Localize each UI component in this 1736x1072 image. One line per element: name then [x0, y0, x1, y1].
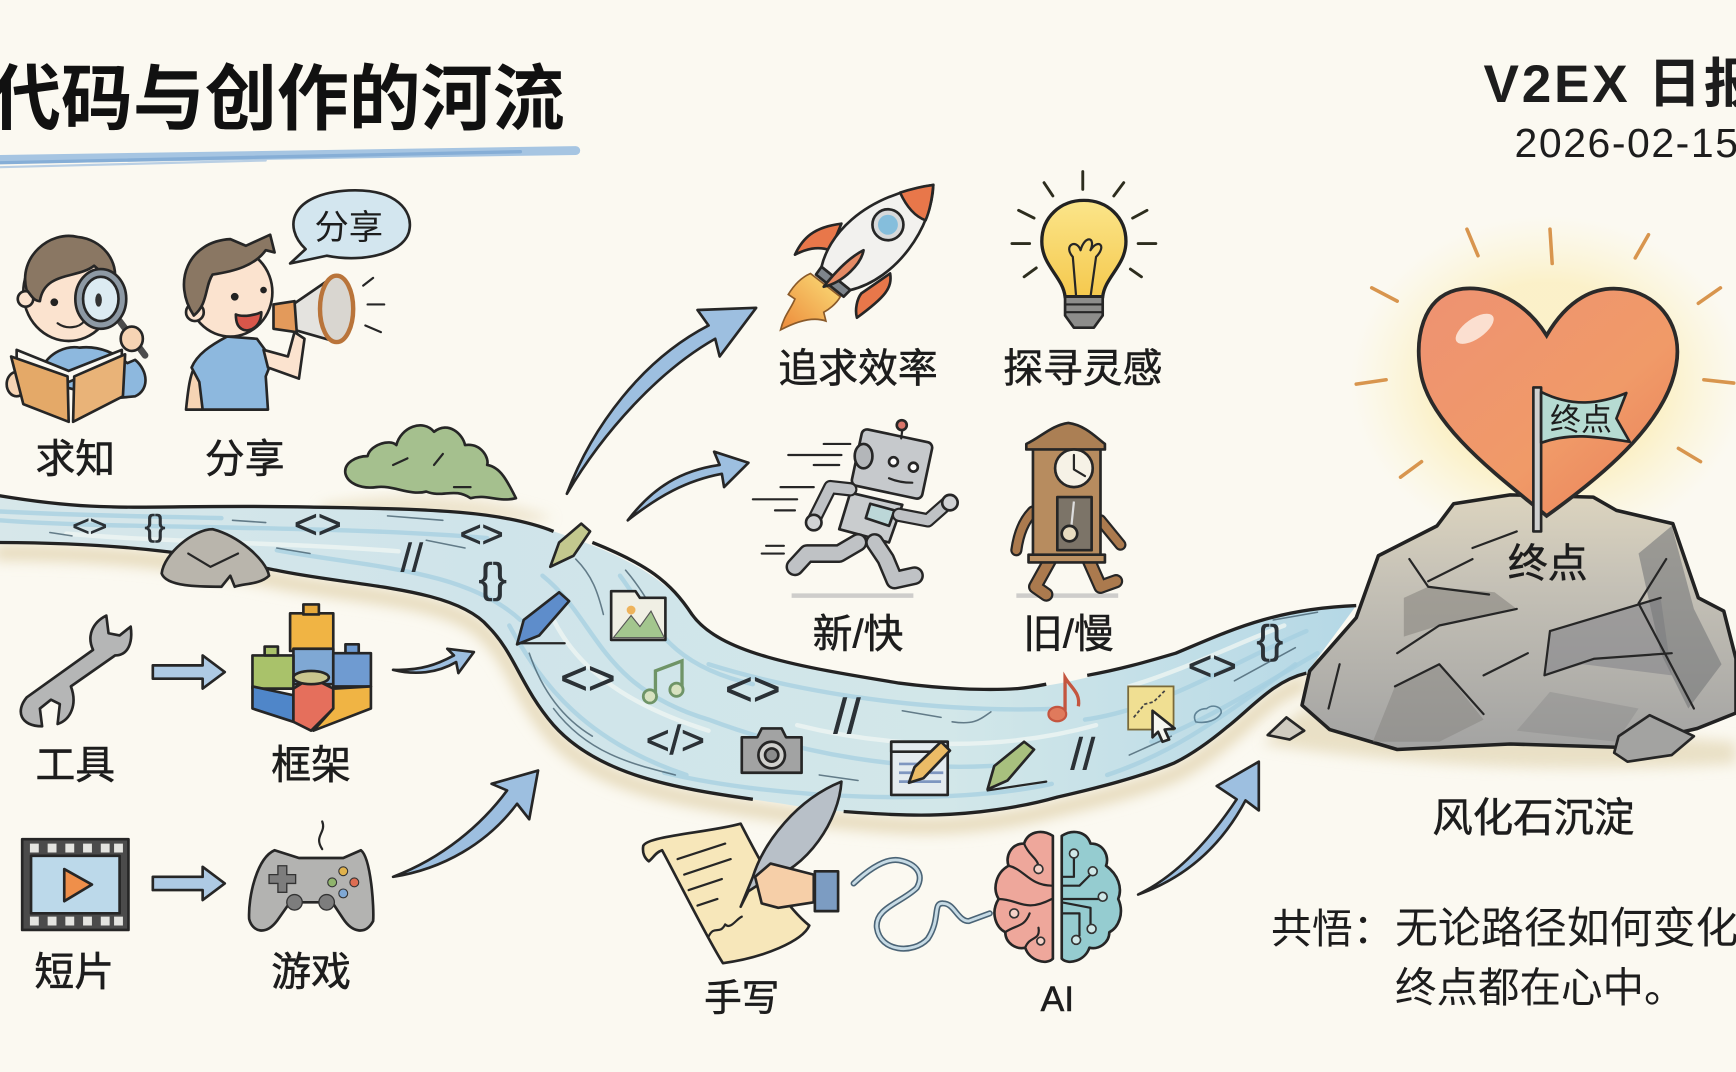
arrow: toward new and fast — [628, 452, 748, 520]
river with banks and current — [0, 495, 1373, 826]
title: 代码与创作的河流 — [0, 60, 565, 140]
river code symbols: {} — [479, 554, 507, 601]
label: rock 终点: 终点 — [1508, 542, 1588, 586]
label: 风化石沉淀: 风化石沉淀 — [1432, 794, 1634, 840]
header: V2EX daily and date: 2026-02-15 — [1515, 120, 1736, 166]
small stone left of boulder — [1268, 717, 1304, 740]
closing insight text: 共悟： — [1271, 906, 1394, 952]
icon: blue pen — [517, 592, 569, 644]
label: 求知: 求知 — [35, 438, 115, 482]
label: 工具: 工具 — [35, 743, 115, 787]
arrow: AI into river — [1138, 762, 1259, 895]
river code symbols: </> — [646, 717, 705, 763]
label: 新/快: 新/快 — [813, 613, 903, 657]
header: V2EX daily and date — [1484, 55, 1736, 166]
river code symbols: <> — [294, 501, 342, 547]
icon: sticky note with cursor — [1128, 686, 1175, 742]
label: AI: AI — [1041, 979, 1074, 1019]
label: 框架: 框架 — [271, 743, 351, 787]
icon: green pencil — [550, 524, 590, 567]
icon: brain half organic half circuit — [994, 832, 1121, 962]
icon: browser window with pencil — [891, 742, 950, 795]
arrow: framework into river — [393, 649, 474, 673]
speech bubble — [290, 190, 410, 263]
icon: building blocks — [252, 604, 371, 731]
figure: boy sharing with megaphone — [184, 235, 384, 410]
river rock — [162, 529, 269, 587]
river code symbols: // — [833, 690, 861, 744]
arrow: game into river — [393, 771, 538, 877]
closing insight text: 无论路径如何变化 — [1395, 905, 1736, 953]
river code symbols: <> — [725, 663, 781, 716]
bush — [321, 425, 554, 523]
icon: running robot — [753, 420, 958, 596]
icon: walking grandfather clock — [1016, 423, 1120, 596]
arrow: toward efficiency — [567, 308, 756, 494]
river code symbols: // — [1070, 730, 1096, 779]
glow and sun rays behind heart — [1351, 216, 1736, 548]
icon: rocket — [781, 185, 933, 330]
arrow: short video to game — [153, 867, 225, 900]
flag: 终点 — [1550, 403, 1612, 438]
river code symbols: {} — [1257, 618, 1283, 662]
label: 手写: 手写 — [704, 977, 779, 1019]
icon: film strip with play button — [22, 839, 128, 930]
icon: red music note — [1048, 678, 1079, 721]
icon: wrench — [21, 616, 131, 726]
heart destination — [1419, 288, 1677, 516]
icon: scroll, quill and hand — [643, 782, 841, 963]
speech bubble: 分享 — [314, 209, 383, 247]
label: 旧/慢: 旧/慢 — [1023, 613, 1114, 657]
icon: camera — [742, 728, 802, 773]
river code symbols: // — [401, 536, 424, 580]
icon: image folder — [611, 591, 665, 640]
label: 探寻灵感: 探寻灵感 — [1003, 347, 1162, 391]
label: 追求效率: 追求效率 — [778, 347, 938, 391]
arrow: tool to framework — [153, 655, 225, 689]
river code symbols — [72, 501, 1283, 779]
closing insight text — [1271, 905, 1736, 1011]
boulder — [1262, 495, 1736, 768]
river code symbols: <> — [560, 652, 616, 705]
closing insight text: 终点都在心中。 — [1395, 964, 1685, 1011]
river code symbols: <> — [72, 510, 107, 543]
icon: green music note — [643, 661, 683, 703]
icon: green pencil in river — [988, 742, 1046, 790]
label: 分享: 分享 — [205, 438, 285, 482]
flag — [1533, 387, 1630, 531]
title underline brush stroke — [0, 151, 576, 167]
small stone right of boulder — [1614, 715, 1694, 762]
label: 游戏: 游戏 — [271, 950, 351, 994]
small cloud scribble in river — [1195, 706, 1221, 722]
figure: boy reading, seeking knowledge — [7, 236, 145, 422]
icon: light bulb — [1012, 172, 1156, 328]
river code symbols: <> — [460, 513, 504, 555]
river code symbols: {} — [145, 508, 165, 543]
wire from hand to brain — [854, 860, 990, 949]
label: 短片: 短片 — [34, 950, 114, 994]
river code symbols: <> — [1188, 642, 1237, 689]
icon: game controller — [249, 821, 373, 930]
